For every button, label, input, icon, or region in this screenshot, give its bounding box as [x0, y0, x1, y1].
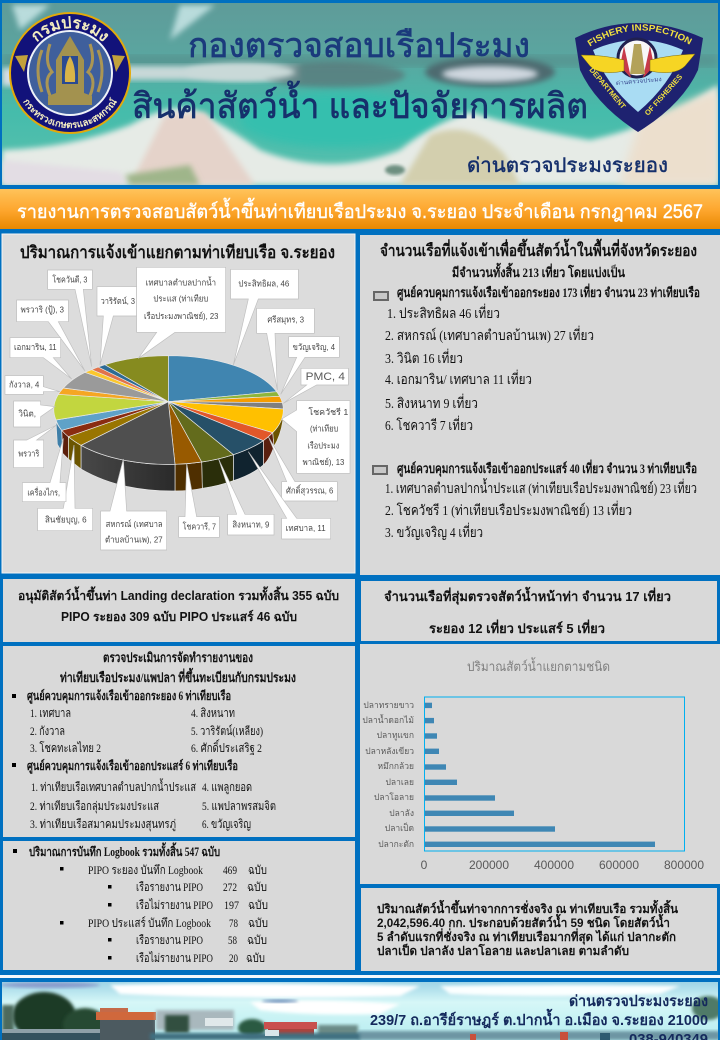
panel: landing weight summary: ปริมาณสัตว์น้ำขึ้นท่าจากการชั่งจริง ณ ท่าเทียบเรือ รวมทั้งสิ้น — [377, 899, 679, 916]
footer address: 239/7 ถ.อารีย์ราษฎร์ ต.ปากน้ำ อ.เมือง จ.ระยอง 21000 — [370, 1008, 708, 1029]
Prasae piers list: 3. ท่าเทียบเรือสมาคมประมงสุนทรภู่ — [30, 817, 176, 832]
3D pie chart: ศรีสมุทร, 3 — [267, 315, 304, 326]
value axis labels: 200000 — [469, 858, 509, 872]
panel: landing weight summary: ปลาเป็ด ปลาลัง ปลาโอลาย และปลาเลย ตามลำดับ — [377, 943, 629, 958]
3D pie chart: กังวาล, 4 — [9, 380, 39, 390]
panel: random inspections — [361, 581, 717, 641]
3D pie chart: ตำบลบ้านเพ), 27 — [105, 534, 163, 544]
Prasae piers list: 5. แพปลาพรสมจิต — [202, 799, 276, 813]
logbook table: PIPO ประแสร์ บันทึก Logbook — [88, 916, 211, 930]
panel: logbook counts: ปริมาณการบันทึก Logbook รวมทั้งสิ้น 547 ฉบับ — [29, 842, 220, 859]
3D pie chart: วินิต, — [18, 409, 36, 419]
panel: pie chart of landings by pier — [2, 234, 355, 573]
value axis labels: 0 — [421, 858, 428, 872]
3D pie chart: เครื่องไกร, — [27, 487, 60, 498]
Rayong centre list — [385, 304, 594, 434]
3D pie chart: โชควัชรี 1 — [308, 407, 349, 417]
3D pie chart: โชควารี, 7 — [183, 522, 216, 532]
3D pie chart: ขวัญเจริญ, 4 — [293, 342, 335, 352]
header title line 1: กองตรวจสอบเรือประมง — [188, 27, 530, 65]
icon: fishery inspection shield — [575, 23, 703, 132]
3D pie chart: โชควันดี, 3 — [52, 275, 87, 285]
category labels: ปลาลัง — [389, 808, 414, 818]
panel: random inspections: จำนวนเรือที่สุ่มตรวจสัตว์น้ำหน้าท่า จำนวน 17 เที่ยว — [384, 586, 671, 605]
panel subheading: มีจำนวนทั้งสิ้น 213 เที่ยว โดยแบ่งเป็น — [452, 262, 625, 280]
3D pie chart — [5, 267, 350, 550]
footer banner — [0, 982, 720, 1040]
panel: landing weight summary: 5 ลำดับแรกที่ชั่งจริง ณ ท่าเทียบเรือมากที่สุด ได้แก่ ปลากะตัก — [377, 928, 676, 945]
panel: landing declaration — [3, 579, 355, 642]
logbook table: ฉบับ — [248, 916, 268, 930]
Prasae centre list — [385, 478, 697, 541]
logbook table: PIPO ระยอง บันทึก Logbook — [88, 863, 203, 877]
Prasae piers list — [12, 758, 276, 832]
value axis labels — [421, 858, 704, 872]
logbook table: ฉบับ — [246, 951, 265, 965]
Rayong piers list: 1. เทศบาล — [30, 706, 71, 720]
beach sands — [2, 85, 718, 185]
bars — [425, 703, 655, 847]
panel: landing weight summary: 2,042,596.40 กก. ประกอบด้วยสัตว์น้ำ 59 ชนิด โดยสัตว์น้ำ — [377, 913, 670, 930]
panel: logbook counts — [3, 841, 355, 970]
3D pie chart: PMC, 4 — [306, 371, 345, 383]
Prasae centre list: 3. ขวัญเจริญ 4 เที่ยว — [385, 523, 483, 541]
icon: department of fisheries seal — [9, 12, 131, 134]
chart title: ปริมาณสัตว์น้ำแยกตามชนิด — [467, 657, 610, 674]
3D pie chart: พรวาริ (ปู้), 3 — [21, 304, 64, 315]
3D pie chart: ศักดิ์สุวรรณ, 6 — [286, 484, 333, 497]
Rayong piers list: 4. สิงหนาท — [191, 706, 235, 720]
Rayong centre list: 5. สิงหนาท 9 เที่ยว — [385, 394, 478, 412]
Rayong piers list: 6. ศักดิ์ประเสริฐ 2 — [191, 739, 262, 755]
category labels: ปลาเป็ด — [385, 822, 414, 833]
3D pie chart: พาณิชย์), 13 — [303, 457, 344, 467]
logbook table: 469 — [223, 863, 237, 877]
panel: landing declaration: อนุมัติสัตว์น้ำขึ้นท่า Landing declaration รวมทั้งสิ้น 355 ฉบับ — [18, 586, 339, 604]
header banner — [2, 3, 718, 185]
pie callout labels — [5, 267, 350, 550]
3D pie chart: สิงหนาท, 9 — [232, 520, 269, 530]
Prasae centre list: 2. โชควัชรี 1 (ท่าเทียบเรือประมงพาณิชย์) 13 เที่ยว — [385, 501, 632, 519]
icon: department of fisheries seal: กรมประมง — [32, 16, 108, 42]
orange title band — [0, 189, 720, 229]
logbook table: เรือไม่รายงาน PIPO — [136, 898, 213, 912]
category labels: ปลาหลังเขียว — [365, 746, 414, 756]
category labels: ปลาน้ำดอกไม้ — [362, 714, 414, 725]
Rayong piers list: ศูนย์ควบคุมการแจ้งเรือเข้าออกระยอง 6 ท่าเทียบเรือ — [27, 688, 231, 704]
logbook table: 197 — [224, 898, 239, 912]
value axis labels: 800000 — [664, 858, 704, 872]
category labels: หมึกกล้วย — [378, 761, 414, 771]
logbook table: 58 — [228, 933, 237, 947]
3D pie chart: ประสิทธิผล, 46 — [238, 279, 289, 289]
Rayong piers list: 5. วาริรัตน์(เหลียง) — [191, 724, 263, 738]
footer office name: ด่านตรวจประมงระยอง — [569, 993, 708, 1010]
panel: random inspections: ระยอง 12 เที่ยว ประแสร์ 5 เที่ยว — [429, 619, 605, 636]
panel: reporting assessment — [3, 646, 355, 837]
Prasae piers list: 4. แพลูกยอด — [202, 780, 252, 795]
category labels: ปลาโอลาย — [374, 792, 414, 802]
logbook table: ฉบับ — [247, 880, 267, 894]
logbook table — [60, 863, 268, 965]
header subtitle: ด่านตรวจประมงระยอง — [467, 155, 668, 177]
3D pie chart: สหกรณ์ (เทศบาล — [106, 519, 163, 529]
3D pie chart: เรือประมงพาณิชย์), 23 — [144, 311, 218, 321]
Rayong piers list: 3. โชคทะเลไทย 2 — [30, 741, 101, 755]
plot frame — [424, 697, 684, 851]
header title line 2: สินค้าสัตว์น้ำ และปัจจัยการผลิต — [132, 80, 588, 126]
logbook table: ฉบับ — [248, 898, 268, 912]
Prasae piers list: ศูนย์ควบคุมการแจ้งเรือเข้าออกประแสร์ 6 ท่าเทียบเรือ — [27, 758, 238, 774]
logbook table: เรือรายงาน PIPO — [136, 933, 203, 947]
category labels: ปลากะตัก — [378, 839, 414, 849]
3D pie chart: เทศบาล, 11 — [286, 523, 326, 533]
icon: list marker — [374, 292, 388, 300]
category labels: ปลาทูแขก — [377, 730, 414, 741]
category labels — [362, 700, 414, 849]
Rayong centre list: 6. โชควารี 7 เที่ยว — [385, 416, 473, 434]
value axis labels: 400000 — [534, 858, 574, 872]
Rayong centre list: 4. เอกมาริน/ เทศบาล 11 เที่ยว — [385, 370, 532, 388]
orange title band: รายงานการตรวจสอบสัตว์น้ำขึ้นท่าเทียบเรือประมง จ.ระยอง ประจำเดือน กรกฎาคม 2567 — [17, 198, 703, 223]
icon: fishery inspection shield: DEPARTMENT — [589, 67, 626, 108]
category labels: ปลาเลย — [386, 777, 414, 787]
3D pie chart: พรวาริ — [18, 449, 40, 459]
3D pie chart: เอกมาริน, 11 — [14, 342, 57, 352]
Rayong centre list: 2. สหกรณ์ (เทศบาลตำบลบ้านเพ) 27 เที่ยว — [385, 326, 594, 344]
icon: fishery inspection shield: FISHERY INSPECTION — [587, 24, 692, 46]
Rayong piers list: 2. กังวาล — [30, 724, 65, 738]
logbook table: ฉบับ — [248, 863, 267, 877]
category labels: ปลาทรายขาว — [363, 700, 414, 710]
3D pie chart: เรือประมง — [307, 440, 339, 450]
icon: department of fisheries seal: กระทรวงเกษตรและสหกรณ์ — [23, 96, 117, 128]
trees and buildings — [12, 990, 77, 1029]
panel: landing weight summary — [361, 888, 717, 971]
Prasae piers list: 6. ขวัญเจริญ — [202, 817, 251, 831]
assessment heading: ตรวจประเมินการจัดทำรายงานของ — [103, 650, 253, 665]
panel: reporting assessment: ท่าเทียบเรือประมง/แพปลา ที่ขึ้นทะเบียนกับกรมประมง — [60, 667, 296, 685]
logbook table: ฉบับ — [247, 933, 267, 947]
icon: fishery inspection shield: ด่านตรวจประมง — [616, 76, 662, 87]
3D pie chart: (ท่าเทียบ — [310, 424, 338, 434]
logbook table: 20 — [229, 951, 238, 965]
Rayong piers list — [12, 688, 263, 755]
logbook table: เรือรายงาน PIPO — [136, 880, 203, 894]
3D pie chart: ประแส (ท่าเทียบ — [153, 294, 208, 304]
panel: landing declaration: PIPO ระยอง 309 ฉบับ PIPO ประแสร์ 46 ฉบับ — [61, 609, 297, 624]
logbook table: 272 — [223, 880, 237, 894]
logbook table: เรือไม่รายงาน PIPO — [136, 951, 213, 965]
logbook table: 78 — [229, 916, 238, 930]
icon: list marker — [373, 466, 387, 474]
3D pie chart: วาริรัตน์, 3 — [101, 296, 135, 306]
Rayong centre list: 3. วินิต 16 เที่ยว — [385, 349, 463, 367]
3D pie chart: เทศบาลตำบลปากน้ำ — [146, 276, 216, 288]
Prasae piers list: 2. ท่าเทียบเรือกลุ่มประมงประแส — [30, 799, 160, 814]
3D pie chart: สินชัยบุญ, 6 — [45, 514, 87, 525]
icon: fishery inspection shield: OF FISHERIES — [645, 74, 682, 115]
Rayong centre list: 1. ประสิทธิผล 46 เที่ยว — [387, 304, 500, 322]
panel: species bar chart — [360, 644, 720, 884]
value axis labels: 600000 — [599, 858, 639, 872]
Prasae piers list: 1. ท่าเทียบเรือเทศบาลตำบลปากน้ำประแส — [31, 778, 197, 794]
panel: vessel counts by control centre — [360, 235, 720, 575]
pie chart heading: ปริมาณการแจ้งเข้าแยกตามท่าเทียบเรือ จ.ระยอง — [20, 242, 335, 262]
white gap above footer — [0, 975, 720, 978]
